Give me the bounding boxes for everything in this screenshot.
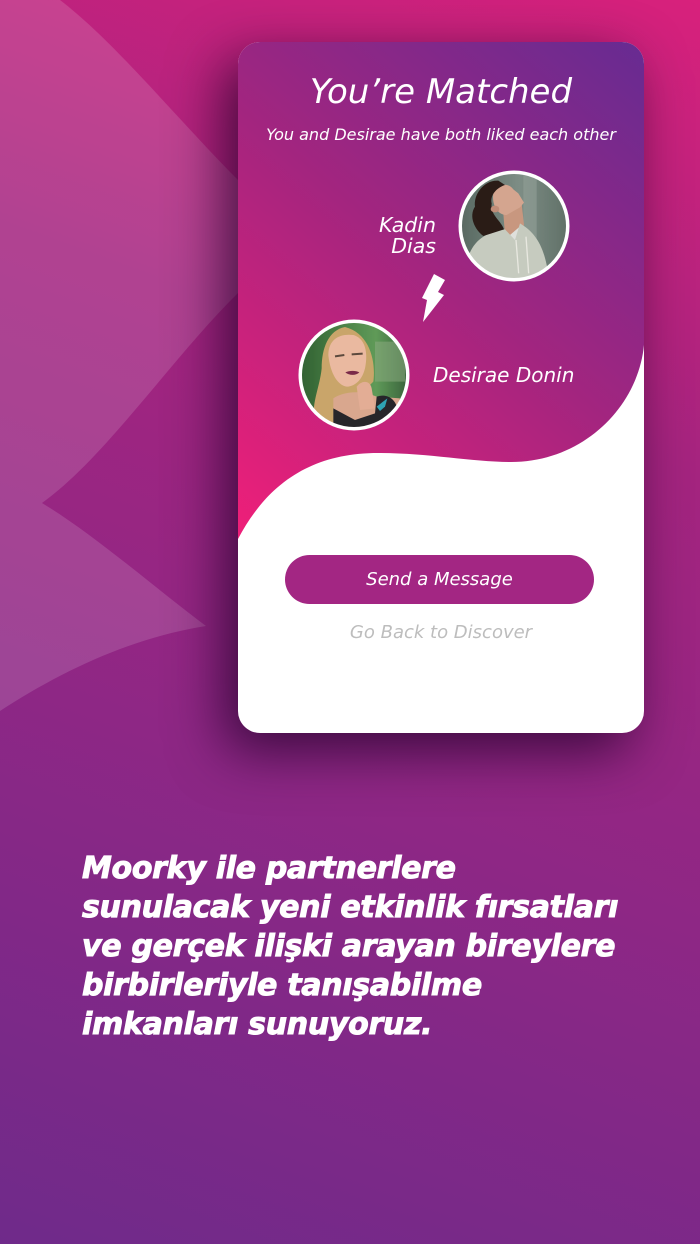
name: Kadin Dias: Dias	[391, 234, 436, 258]
button: send a message	[285, 555, 594, 604]
button: send a message: Send a Message	[366, 569, 513, 590]
body text: Moorky ile partnerlere	[82, 851, 456, 886]
body text: birbirleriyle tanışabilme	[82, 968, 482, 1003]
icon: lightning bolt	[422, 274, 445, 322]
body text: sunulacak yeni etkinlik fırsatları	[82, 890, 618, 925]
name: Kadin Dias: Kadin	[379, 213, 436, 237]
card shadow	[238, 42, 644, 733]
app card	[238, 42, 644, 733]
photo: Kadin Dias	[457, 170, 570, 283]
name: Kadin Dias	[379, 213, 436, 258]
body text: ve gerçek ilişki arayan bireylere	[82, 929, 615, 964]
name: Desirae Donin: Desirae Donin	[433, 363, 574, 387]
link: go back to discover: Go Back to Discover	[350, 622, 532, 643]
body text: imkanları sunuyoruz.	[82, 1007, 432, 1042]
photo: Desirae Donin	[297, 318, 410, 432]
heading: You’re Matched	[310, 72, 572, 112]
subheading: You and Desirae have both liked each other	[266, 125, 616, 144]
body text	[82, 851, 618, 1042]
